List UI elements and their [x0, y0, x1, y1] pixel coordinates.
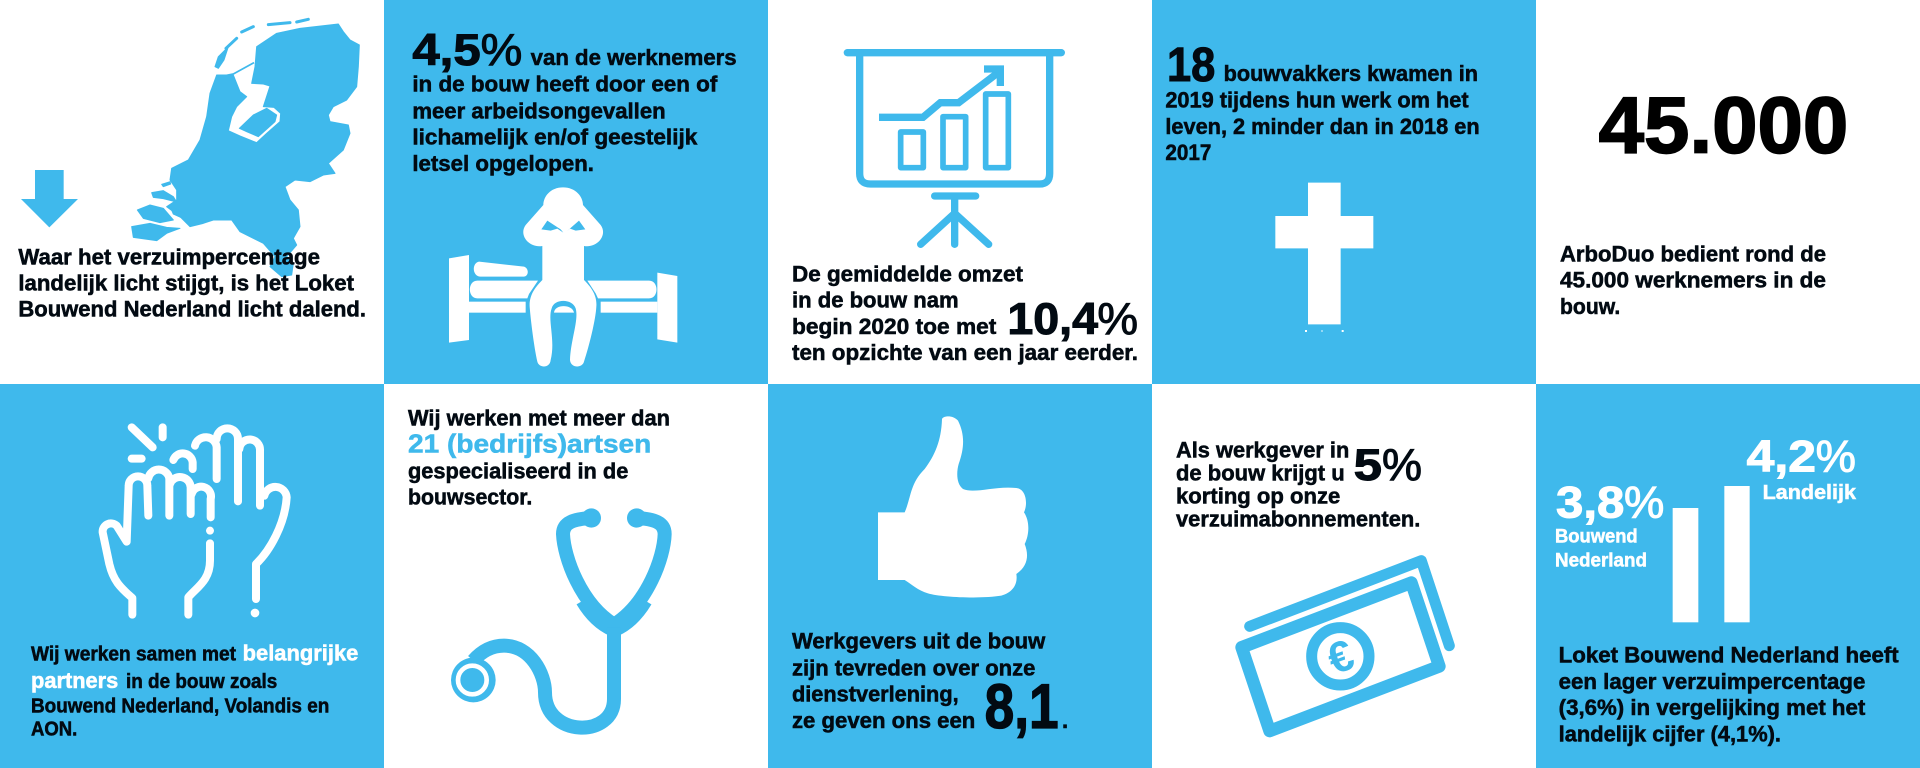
panel: partners [0, 384, 384, 768]
icon: high five hands [103, 427, 287, 617]
text: omzet 10,4%: De gemiddelde omzet [792, 262, 1024, 287]
text: 4,5% van de werknemers [412, 26, 737, 176]
text: korting 5%: 5 [1354, 441, 1382, 490]
text: rapportcijfer 8,1 [792, 628, 1068, 742]
text: 4,5% van de werknemers: letsel opgelopen. [412, 151, 594, 176]
text: rapportcijfer 8,1: . [1062, 708, 1068, 733]
text: 18 bouwvakkers: 18 [1167, 39, 1215, 92]
text: bedrijfsartsen: 21 (bedrijfs)artsen [408, 428, 651, 458]
text: bedrijfsartsen: gespecialiseerd in de [408, 458, 628, 483]
text: bedrijfsartsen: Wij werken met meer dan [408, 406, 670, 431]
bar chart: Bouwend Nederland vs landelijk: 3,8 [1556, 478, 1624, 527]
icon: euro banknotes [1242, 561, 1449, 731]
panel: verzuim map [0, 0, 384, 384]
panel: bedrijfsartsen [384, 384, 768, 768]
text: verzuimpercentage: landelijk licht stijgt, is het Loket [18, 271, 355, 296]
icon: thumbs up [878, 416, 1028, 597]
text: 4,5% van de werknemers: lichamelijk en/of geestelijk [412, 124, 698, 149]
text: 18 bouwvakkers: leven, 2 minder dan in 2018 en [1165, 114, 1480, 139]
bar chart: Bouwend Nederland vs landelijk [1555, 432, 1857, 622]
text: rapportcijfer 8,1: Werkgevers uit de bouw [792, 628, 1046, 653]
bar chart: Bouwend Nederland vs landelijk: Nederland [1555, 550, 1647, 571]
text: 4,5% van de werknemers: in de bouw heeft door een of [412, 72, 718, 97]
panel: 4,5% letsel [384, 0, 768, 384]
text: 18 bouwvakkers: 2017 [1165, 140, 1211, 165]
bar chart: Bouwend Nederland vs landelijk: % [1816, 432, 1856, 481]
panel: verzuim vergelijking [1536, 384, 1920, 768]
heading: 45.000: 45.000 [1599, 81, 1848, 170]
text: ArboDuo: bouw. [1560, 294, 1620, 319]
text: rapportcijfer 8,1: zijn tevreden over onze [792, 656, 1035, 681]
text: lager verzuimpercentage: (3,6%) in vergelijking met het [1559, 695, 1866, 720]
bar chart: Bouwend Nederland vs landelijk: % [1624, 478, 1664, 527]
text: omzet 10,4%: % [1097, 295, 1138, 344]
text: 18 bouwvakkers [1165, 39, 1480, 165]
text: 4,5% van de werknemers: % [481, 26, 522, 75]
icon: stethoscope [451, 508, 665, 728]
text: partners: AON. [31, 719, 77, 741]
text: lager verzuimpercentage [1559, 642, 1899, 746]
text: ArboDuo [1560, 242, 1826, 319]
text: omzet 10,4% [792, 262, 1138, 365]
text: ArboDuo: 45.000 werknemers in de [1560, 268, 1826, 293]
text: lager verzuimpercentage: een lager verzuimpercentage [1559, 669, 1865, 694]
icon: presentation board with rising chart [847, 53, 1061, 244]
text: omzet 10,4%: begin 2020 toe met [792, 314, 997, 339]
text: korting 5%: Als werkgever in [1176, 437, 1349, 462]
bar chart: Bouwend Nederland vs landelijk: Bouwend [1555, 526, 1638, 547]
panel: 18 bouwvakkers [1152, 0, 1536, 384]
text: korting 5%: de bouw krijgt u [1176, 461, 1345, 486]
text: omzet 10,4%: ten opzichte van een jaar eerder. [792, 340, 1138, 365]
text: korting 5%: korting op onze [1176, 483, 1340, 508]
text: korting 5%: % [1382, 441, 1422, 490]
icon: cross [1275, 183, 1373, 332]
text: bedrijfsartsen: bouwsector. [408, 485, 532, 510]
text: lager verzuimpercentage: landelijk cijfer (4,1%). [1559, 721, 1781, 746]
text: partners: in de bouw zoals [126, 671, 277, 693]
text: 4,5% van de werknemers: meer arbeidsongevallen [412, 98, 666, 123]
text: rapportcijfer 8,1: dienstverlening, [792, 681, 959, 706]
text: partners: partners [31, 668, 118, 693]
bar chart: Bouwend Nederland vs landelijk: Landelijk [1763, 481, 1857, 504]
panel: 45.000 [1536, 0, 1920, 384]
text: 18 bouwvakkers: 2019 tijdens hun werk om het [1165, 87, 1469, 112]
text: 4,5% van de werknemers: van de werknemers [531, 45, 737, 70]
text: verzuimpercentage [18, 244, 366, 322]
text: partners [31, 641, 358, 741]
text: 18 bouwvakkers: bouwvakkers kwamen in [1224, 61, 1478, 86]
text: partners: Wij werken samen met [31, 644, 236, 666]
text: bedrijfsartsen [408, 406, 670, 510]
panel: omzet [768, 0, 1152, 384]
text: partners: belangrijke [243, 641, 358, 666]
text: partners: Bouwend Nederland, Volandis en [31, 695, 329, 717]
text: 4,5% van de werknemers: 4,5 [412, 26, 481, 75]
text: omzet 10,4%: in de bouw nam [792, 288, 959, 313]
text: verzuimpercentage: Bouwend Nederland licht dalend. [18, 297, 366, 322]
panel: tevredenheid [768, 384, 1152, 768]
icon: down arrow [21, 170, 78, 227]
text: omzet 10,4%: 10,4 [1007, 295, 1098, 344]
icon: map of the Netherlands [132, 19, 359, 277]
icon: euro banknotes: € [1321, 631, 1360, 684]
text: ArboDuo: ArboDuo bedient rond de [1560, 242, 1826, 267]
text: lager verzuimpercentage: Loket Bouwend Nederland heeft [1559, 642, 1899, 667]
text: korting 5%: verzuimabonnementen. [1176, 506, 1420, 531]
icon: person sitting on bed [449, 187, 677, 366]
bar chart: Bouwend Nederland vs landelijk: 4,2 [1747, 432, 1816, 481]
text: rapportcijfer 8,1: 8,1 [985, 672, 1059, 742]
text: rapportcijfer 8,1: ze geven ons een [792, 708, 975, 733]
panel: korting [1152, 384, 1536, 768]
text: korting 5% [1176, 437, 1422, 531]
text: verzuimpercentage: Waar het verzuimpercentage [18, 244, 320, 269]
